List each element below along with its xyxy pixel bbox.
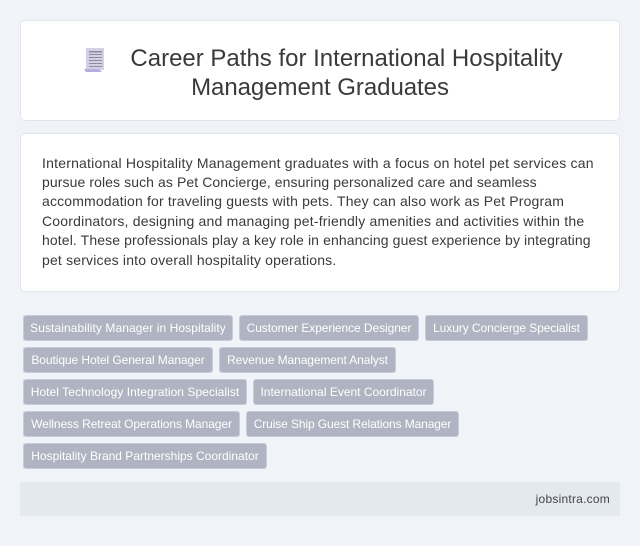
tag: Boutique Hotel General Manager [31,353,205,367]
header panel [20,20,620,121]
tag: Hospitality Brand Partnerships Coordinator [31,449,259,463]
tag: Sustainability Manager in Hospitality [30,321,226,335]
description text: International Hospitality Management graduates with a focus on hotel pet services can [42,155,594,171]
footer bar [20,482,620,516]
tag [23,347,213,373]
tag [246,411,459,437]
icon: document scroll [84,48,104,72]
description text: Coordinators, designing and managing pet-friendly amenities and activities within the [42,213,584,229]
tag: Revenue Management Analyst [227,353,388,367]
tag: Hotel Technology Integration Specialist [31,385,239,399]
title: Career Paths for International Hospitality [130,45,563,72]
title [130,45,563,101]
tag [425,315,588,341]
tag: Wellness Retreat Operations Manager [31,417,232,431]
tag [239,315,419,341]
description panel [20,133,620,292]
tag: Cruise Ship Guest Relations Manager [254,417,451,431]
tag [253,379,434,405]
tag [23,411,240,437]
tag [23,379,247,405]
footer source text: jobsintra.com [536,492,610,506]
tag [23,315,233,341]
career tags [23,315,588,469]
tag: Luxury Concierge Specialist [433,321,580,335]
title: Management Graduates [191,74,449,101]
description text: accommodation for traveling guests with pets. They can also work as Pet Program [42,193,564,209]
description text: hotel. These professionals play a key role in enhancing guest experience by integrating [42,232,591,248]
tag [219,347,396,373]
description text: pursue roles such as Pet Concierge, ensuring personalized care and seamless [42,174,537,190]
tag: Customer Experience Designer [247,321,411,335]
tag [23,443,267,469]
description text: pet services into overall hospitality operations. [42,252,336,268]
description text [42,155,594,268]
tag: International Event Coordinator [260,385,427,399]
